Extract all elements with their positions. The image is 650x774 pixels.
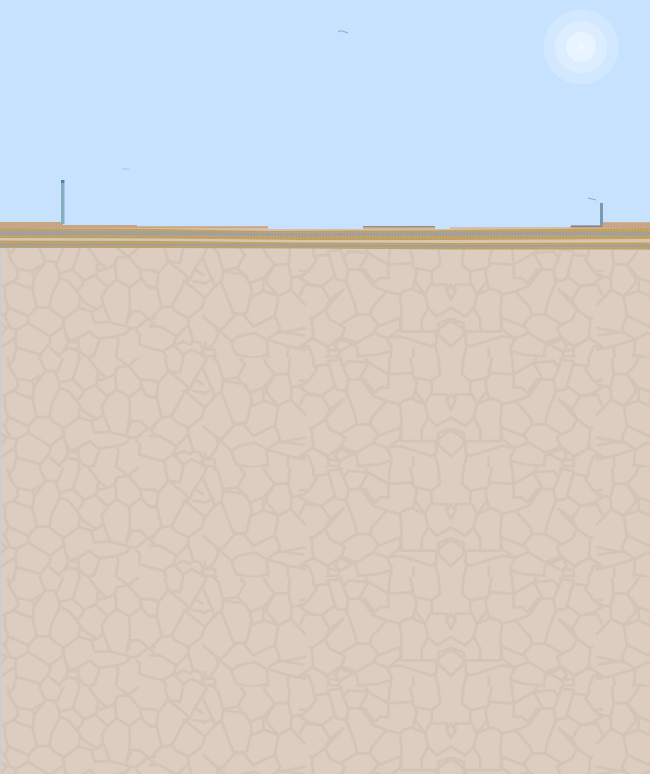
rock strata — [0, 222, 650, 250]
bird: left faint — [122, 168, 129, 170]
right pole and pipe — [571, 203, 603, 227]
bird: right — [588, 198, 596, 200]
left pole — [61, 180, 64, 224]
sky — [0, 0, 650, 232]
surface line — [363, 226, 435, 227]
bird: top centre — [338, 31, 348, 33]
cracked ground — [0, 245, 650, 774]
sun — [544, 10, 618, 84]
